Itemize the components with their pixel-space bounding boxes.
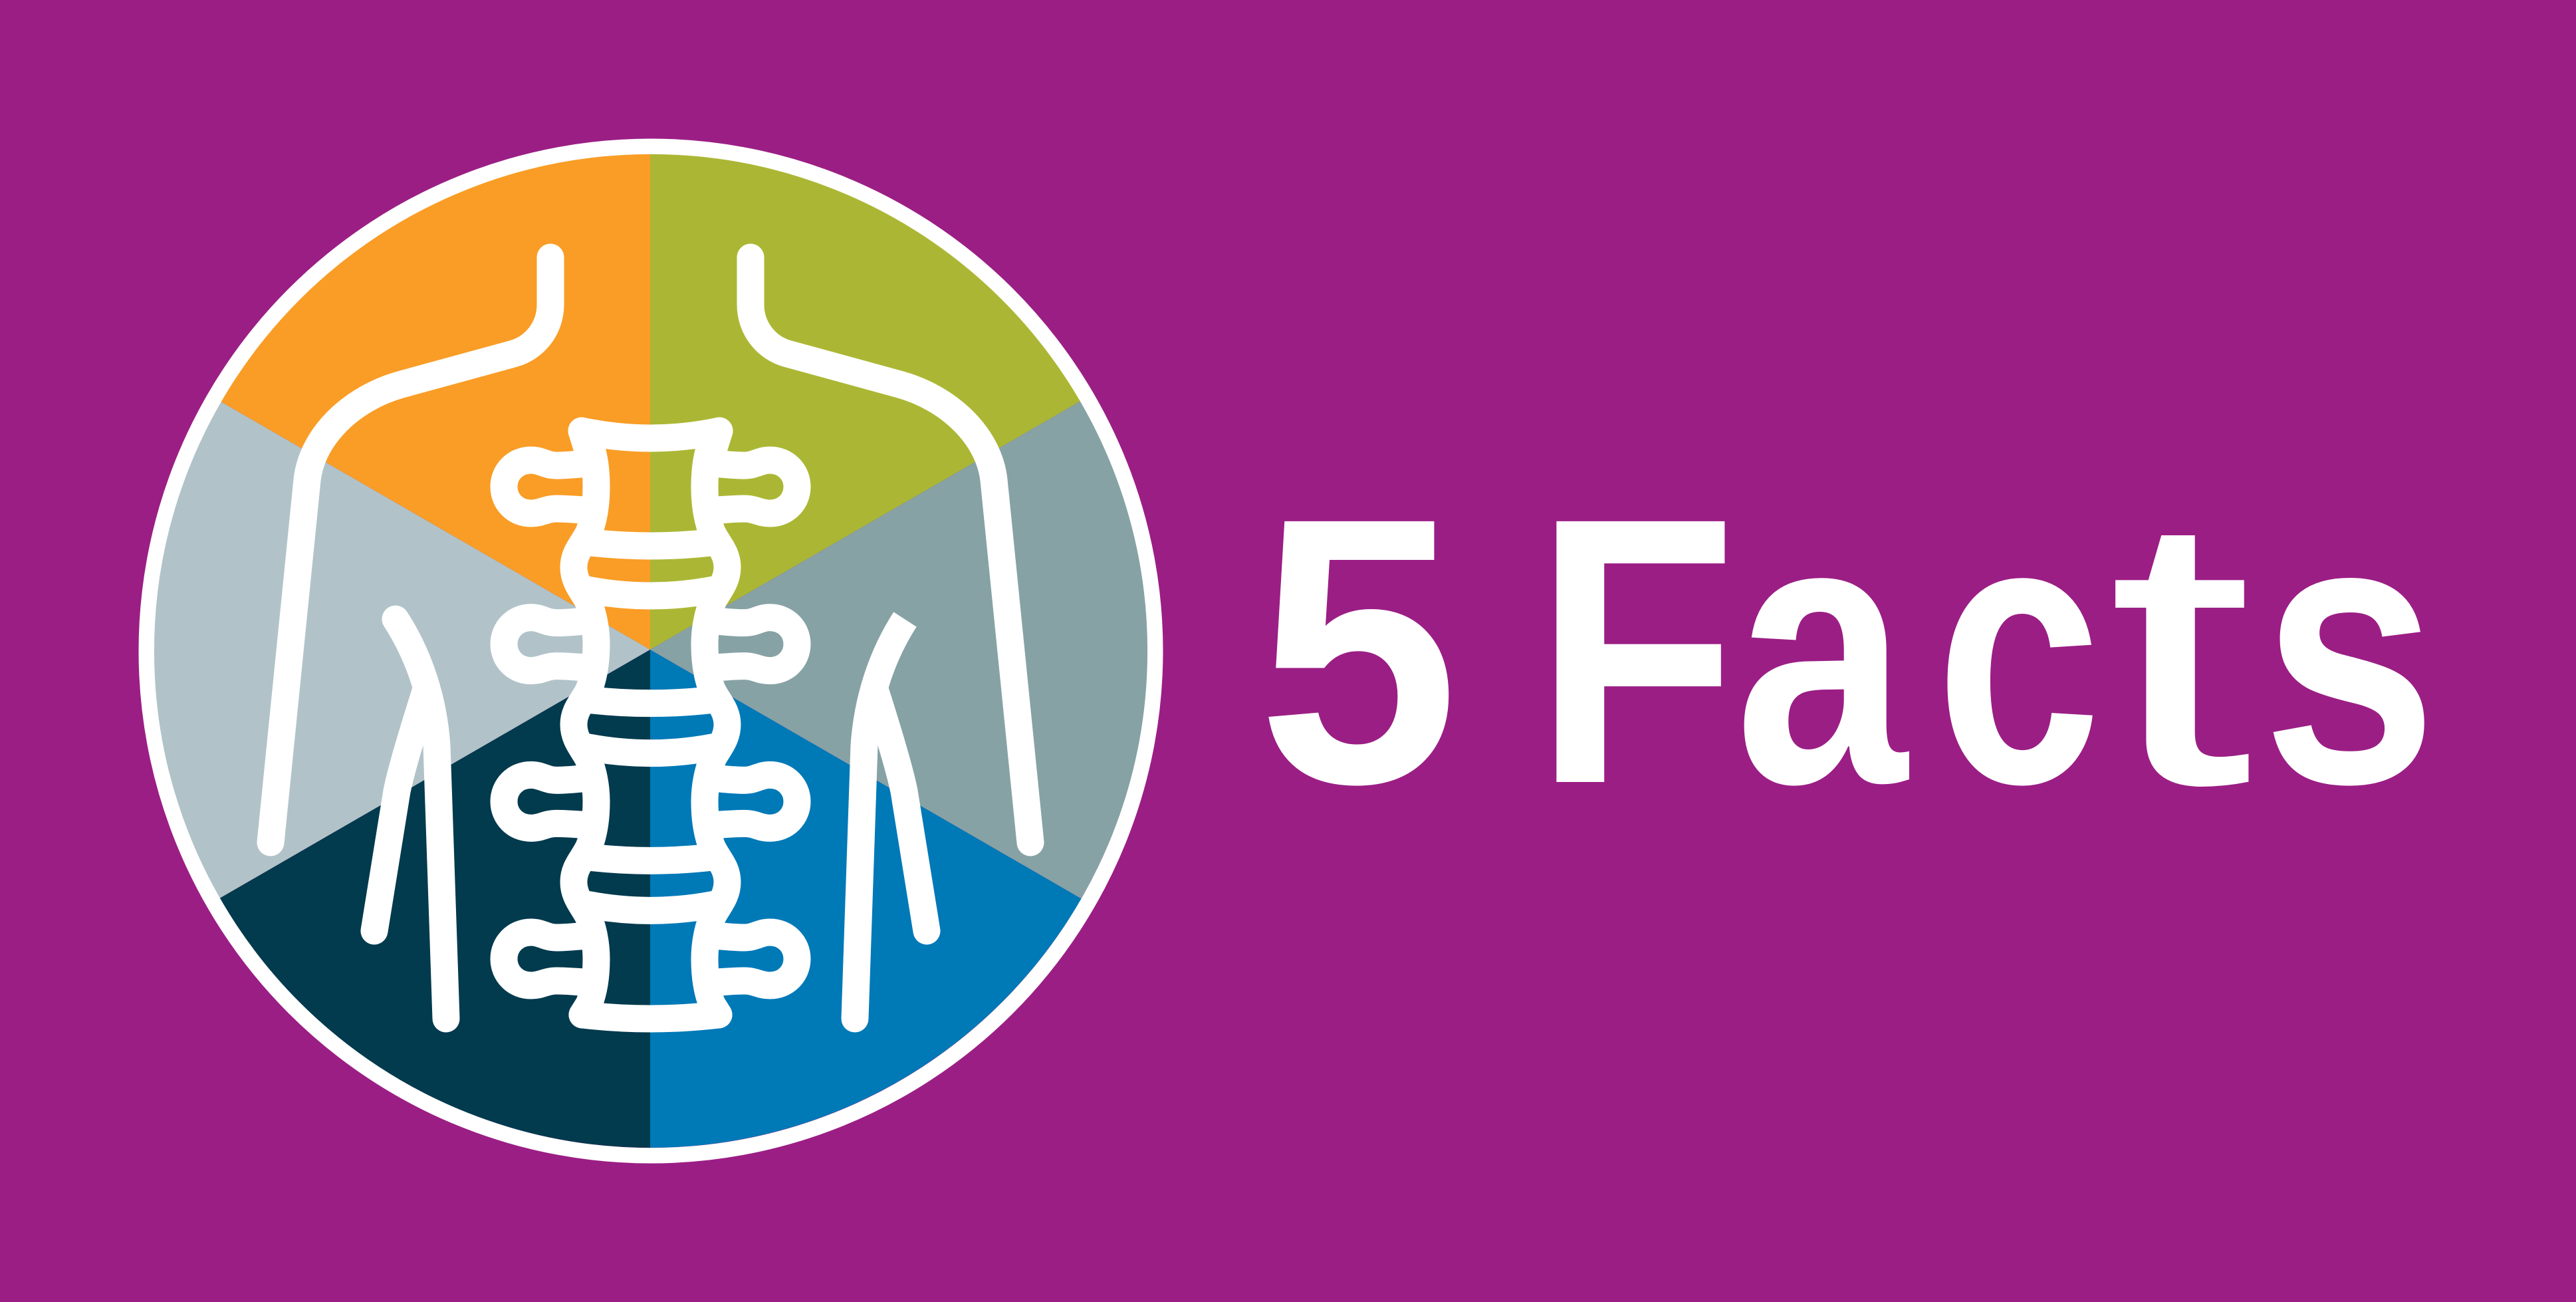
vertebra 1 — [504, 460, 797, 644]
wedge: orange — [219, 152, 650, 650]
icon: torso and spine — [271, 257, 1030, 1032]
title letter a: a — [1735, 440, 1909, 863]
title letter F: F — [1534, 440, 1737, 862]
icon: right shoulder line — [751, 257, 1030, 843]
vertebra 2 — [504, 618, 797, 801]
title letter t: t — [2110, 440, 2252, 863]
wedge: navy — [219, 650, 650, 1148]
icon: left rib — [374, 619, 446, 1019]
wedge: sage — [650, 400, 1148, 899]
circular emblem — [146, 146, 1155, 1156]
white ring — [146, 146, 1155, 1156]
wedge: blue — [650, 650, 1082, 1148]
icon: left shoulder line — [271, 257, 550, 843]
icon: spine — [504, 431, 797, 1019]
wedge: green — [650, 152, 1082, 650]
title letter c: c — [1936, 439, 2101, 862]
vertebra 4 — [504, 932, 797, 1019]
top end plate — [582, 431, 719, 438]
title letter 5: 5 — [1258, 440, 1459, 863]
title: 5 Facts — [1258, 439, 2437, 863]
title letter s: s — [2262, 439, 2437, 862]
wedge: light grey — [152, 400, 650, 899]
icon: right rib — [842, 620, 927, 1032]
top vertebra neck right — [705, 431, 719, 487]
vertebra 3 — [504, 775, 797, 959]
top vertebra neck left — [582, 431, 596, 487]
